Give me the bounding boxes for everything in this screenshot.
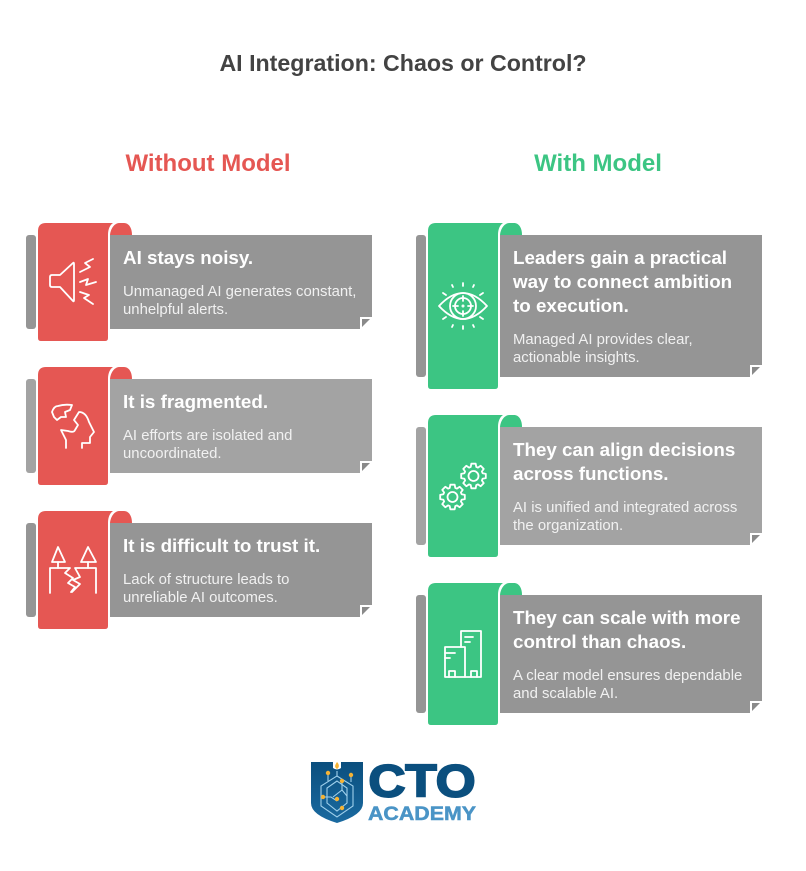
body text: Unmanaged AI generates constant, xyxy=(123,284,356,300)
body text: Managed AI provides clear, xyxy=(513,332,693,348)
heading text: They can align decisions xyxy=(513,439,735,460)
body text: the organization. xyxy=(513,518,623,534)
logo shield xyxy=(311,762,363,823)
heading text: way to connect ambition xyxy=(512,271,732,292)
logo wordmark: CTO xyxy=(368,756,476,806)
logo subtitle: ACADEMY xyxy=(368,804,476,825)
heading: with model: With Model xyxy=(534,150,662,177)
heading text: control than chaos. xyxy=(513,631,686,652)
body text: Lack of structure leads to xyxy=(123,572,289,588)
heading text: They can scale with more xyxy=(513,607,741,628)
body text: unhelpful alerts. xyxy=(123,302,228,318)
body text: unreliable AI outcomes. xyxy=(123,590,278,606)
logo: CTO Academy xyxy=(311,756,476,825)
icon: gears xyxy=(440,464,486,509)
panel: It is fragmented xyxy=(26,367,372,485)
body text: A clear model ensures dependable xyxy=(513,668,742,684)
icon: cracked ground with trees xyxy=(50,547,96,593)
body text xyxy=(123,572,289,606)
heading text: AI stays noisy. xyxy=(123,247,253,268)
heading: without model: Without Model xyxy=(125,150,291,177)
heading text xyxy=(512,247,732,316)
panel: align decisions xyxy=(416,415,762,557)
body text: AI is unified and integrated across xyxy=(513,500,737,516)
heading text: It is difficult to trust it. xyxy=(123,535,320,556)
body text xyxy=(123,284,356,318)
panel: AI stays noisy xyxy=(26,223,372,341)
heading text: Leaders gain a practical xyxy=(513,247,727,268)
title: AI Integration: Chaos or Control? xyxy=(219,50,587,76)
body text xyxy=(513,332,693,366)
heading text: It is fragmented. xyxy=(123,391,268,412)
body text: and scalable AI. xyxy=(513,686,618,702)
heading text: across functions. xyxy=(513,463,669,484)
heading text xyxy=(513,607,741,652)
icon: fragmented head xyxy=(52,405,94,448)
panel: difficult to trust xyxy=(26,511,372,629)
body text: AI efforts are isolated and xyxy=(123,428,292,444)
icon: buildings xyxy=(445,631,481,677)
body text xyxy=(513,500,737,534)
panel: leaders gain a practical way xyxy=(416,223,762,389)
icon: megaphone xyxy=(50,259,96,304)
body text xyxy=(513,668,742,702)
heading text: to execution. xyxy=(513,295,629,316)
icon: eye with target xyxy=(439,283,487,329)
body text xyxy=(123,428,292,462)
heading text xyxy=(513,439,735,484)
panel: scale with control xyxy=(416,583,762,725)
body text: actionable insights. xyxy=(513,350,640,366)
body text: uncoordinated. xyxy=(123,446,222,462)
